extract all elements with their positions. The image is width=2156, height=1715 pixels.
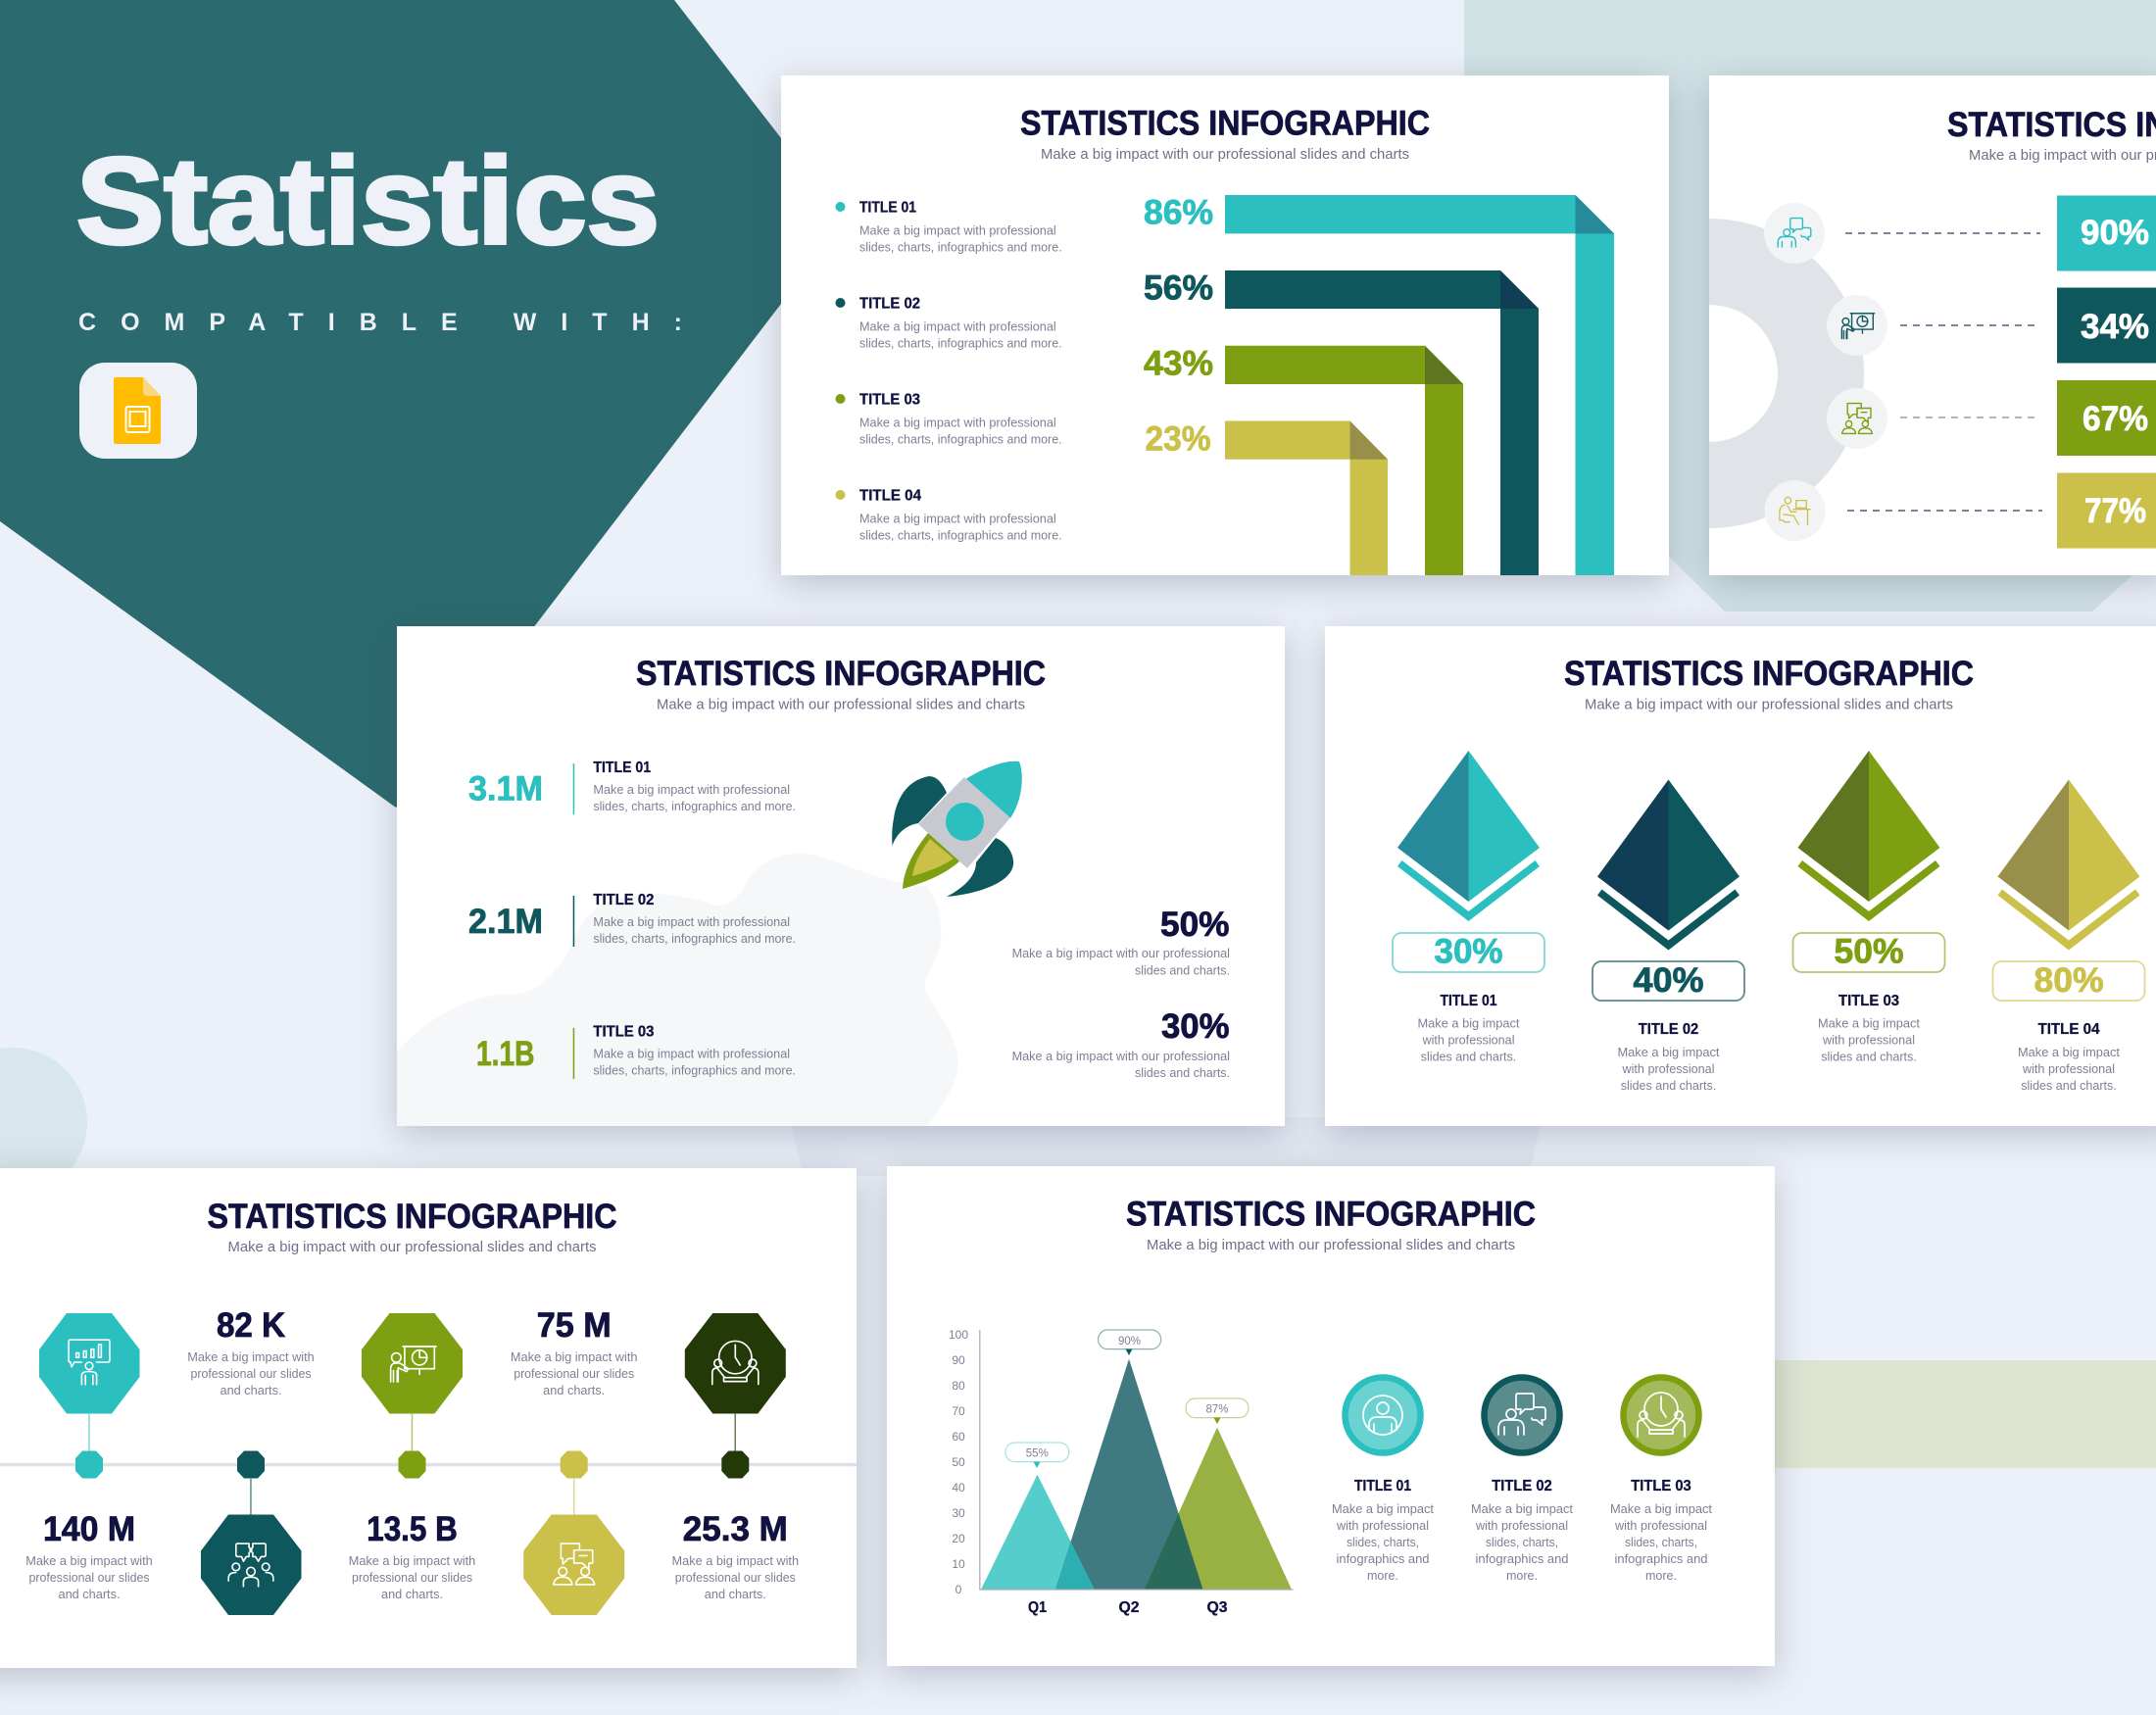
item 90% [1764, 196, 2156, 270]
callout 90%: 90% [1118, 1334, 1141, 1348]
stat row 1.1B: TITLE 03 [593, 1023, 654, 1041]
ribbon bar 56%: 56% [1144, 269, 1213, 308]
ribbon bar 56% [1144, 269, 1539, 575]
node: clock meeting, 25.3 M: 25.3 M [683, 1510, 788, 1548]
stat row 2.1M: TITLE 02 [593, 892, 654, 908]
y axis labels: 10 [952, 1557, 965, 1571]
y axis labels: 0 [956, 1583, 962, 1596]
item: title 01 [1332, 1378, 1435, 1583]
legend item 1: Make a big impact with professional [859, 223, 1056, 237]
panel: gear percentages [1709, 75, 2156, 575]
stat row 2.1M: 2.1M [468, 903, 543, 941]
stat row 3.1M: TITLE 01 [593, 760, 651, 776]
legend item 3 [835, 392, 1062, 447]
stat 30%: slides and charts. [1135, 1066, 1230, 1080]
item: title 03: with professional [1614, 1519, 1707, 1533]
legend item 4: slides, charts, infographics and more. [859, 529, 1062, 543]
item 77%: 77% [2084, 492, 2146, 530]
diamond 80% [1993, 780, 2144, 1093]
callout 55%: 55% [1026, 1446, 1049, 1460]
item 90%: 90% [2081, 214, 2149, 252]
diamond 50%: 50% [1835, 933, 1903, 970]
panel: triangle chart [887, 1166, 1775, 1666]
legend item 2 [835, 296, 1062, 351]
node: chart presenter, 140 M [25, 1313, 153, 1601]
y axis labels: 30 [952, 1506, 965, 1520]
ribbon bar 86% [1144, 194, 1614, 575]
diamond 80%: Make a big impact [2018, 1046, 2121, 1059]
item 77% [1764, 472, 2156, 549]
item: title 02 [1471, 1378, 1574, 1583]
item: title 03 [1610, 1378, 1713, 1583]
diamond 50%: with professional [1822, 1033, 1915, 1047]
icon: rocket [892, 761, 1022, 897]
hero title: Statistics [76, 133, 660, 270]
chart: triangles: Q1 [1028, 1599, 1047, 1616]
diamond 50%: TITLE 03 [1838, 993, 1899, 1009]
y axis labels: 20 [952, 1532, 965, 1545]
diamond 50%: slides and charts. [1821, 1051, 1917, 1064]
diamond 30%: Make a big impact [1417, 1017, 1520, 1031]
item: title 02: Make a big impact [1471, 1502, 1574, 1516]
subheading: Make a big impact with our professional slides and charts [1147, 1237, 1515, 1253]
ribbon bar 43%: 43% [1144, 345, 1213, 382]
node: clock meeting, 25.3 M: professional our slides [675, 1571, 796, 1585]
item: title 03: TITLE 03 [1631, 1478, 1691, 1494]
panel: timeline [0, 1168, 857, 1668]
callout 55% [1005, 1443, 1069, 1468]
background shape: pale green band [1775, 1360, 2156, 1468]
item: title 01: slides, charts, [1347, 1536, 1419, 1549]
node: presenter, 13.5 B: professional our slides [352, 1571, 472, 1585]
subheading: Make a big impact with our professional slides and charts [1585, 696, 1953, 713]
stat 30%: Make a big impact with our professional [1012, 1050, 1230, 1063]
node: conversation, 75 M: and charts. [543, 1384, 605, 1397]
diamond 40%: with professional [1621, 1062, 1715, 1076]
stat 30%: 30% [1161, 1007, 1229, 1046]
diamond 30%: slides and charts. [1421, 1051, 1516, 1064]
node: conversation, 75 M: 75 M [537, 1306, 612, 1345]
heading: STATISTICS INFOGRAPHIC [208, 1198, 617, 1236]
diamond 40%: TITLE 02 [1639, 1021, 1698, 1038]
diamond 40%: Make a big impact [1617, 1046, 1720, 1059]
background shape: faint hexagon behind panels [789, 1117, 1543, 1176]
diamond 80%: slides and charts. [2021, 1079, 2117, 1093]
legend item 1: TITLE 01 [859, 200, 916, 216]
diamond 50% [1793, 751, 1944, 1064]
legend item 4: TITLE 04 [859, 488, 921, 504]
node: presenter, 13.5 B [349, 1313, 475, 1601]
stat row 1.1B: 1.1B [476, 1035, 535, 1073]
stat row 3.1M: 3.1M [468, 770, 543, 808]
node: group, 82 K [187, 1306, 315, 1615]
timeline axis [0, 1463, 857, 1466]
legend item 3: slides, charts, infographics and more. [859, 433, 1062, 447]
stat 50%: 50% [1160, 906, 1229, 944]
legend item 3: Make a big impact with professional [859, 416, 1056, 429]
node: clock meeting, 25.3 M: Make a big impact with [672, 1554, 799, 1568]
stat 50%: slides and charts. [1135, 964, 1230, 978]
node: conversation, 75 M [511, 1306, 637, 1615]
item 67% [1827, 380, 2156, 456]
y axis labels: 70 [952, 1404, 965, 1418]
node: presenter, 13.5 B: and charts. [381, 1588, 443, 1601]
legend item 2: TITLE 02 [859, 296, 920, 312]
diamond 30%: TITLE 01 [1441, 993, 1497, 1009]
y axis labels: 80 [952, 1379, 965, 1393]
item 67%: 67% [2082, 400, 2148, 438]
smoke cloud [397, 854, 958, 1126]
node: group, 82 K: 82 K [217, 1306, 285, 1345]
item 34% [1827, 288, 2156, 363]
stat row 1.1B: slides, charts, infographics and more. [593, 1064, 796, 1078]
panel: rocket statistics [397, 626, 1285, 1126]
legend item 2: slides, charts, infographics and more. [859, 337, 1062, 351]
node: presenter, 13.5 B: 13.5 B [367, 1510, 458, 1548]
node: conversation, 75 M: Make a big impact with [511, 1350, 637, 1364]
panel: diamonds [1325, 626, 2156, 1126]
subheading: Make a big impact with our professional slides and charts [1041, 146, 1409, 163]
legend item 2: Make a big impact with professional [859, 319, 1056, 333]
diamond 30%: with professional [1421, 1033, 1515, 1047]
item: title 02: more. [1506, 1569, 1538, 1583]
subheading: Make a big impact with our professional slides and charts [657, 696, 1025, 713]
node: conversation, 75 M: professional our slides [514, 1367, 634, 1381]
legend item 4 [835, 488, 1062, 543]
ribbon bar 86%: 86% [1144, 194, 1213, 231]
diamond 40%: slides and charts. [1621, 1079, 1716, 1093]
diamond 30% [1393, 751, 1544, 1064]
stat row 2.1M: Make a big impact with professional [593, 915, 790, 929]
node: group, 82 K: and charts. [220, 1384, 282, 1397]
subheading: Make a big impact with our professional slides and charts [227, 1239, 596, 1255]
compatible with label: COMPATIBLE WITH: [78, 309, 682, 336]
y axis labels: 50 [952, 1455, 965, 1469]
panel: ribbon bars [781, 75, 1669, 575]
item: title 02: TITLE 02 [1492, 1478, 1552, 1494]
diamond 50%: Make a big impact [1818, 1017, 1921, 1031]
item: title 01: more. [1367, 1569, 1398, 1583]
stat row 1.1B [476, 1023, 796, 1079]
node: chart presenter, 140 M: professional our slides [29, 1571, 149, 1585]
chart: triangles: Q2 [1119, 1599, 1140, 1616]
node: group, 82 K: Make a big impact with [187, 1350, 315, 1364]
legend item 3: TITLE 03 [859, 392, 920, 408]
stat 50%: Make a big impact with our professional [1012, 947, 1230, 960]
background shape: pale teal hexagon [1464, 0, 2156, 612]
diamond 40%: 40% [1633, 961, 1703, 1000]
node: clock meeting, 25.3 M [672, 1313, 799, 1601]
diamond 80%: 80% [2034, 961, 2103, 1000]
background shape: pale teal circle [0, 1048, 87, 1197]
ribbon bar 23%: 23% [1145, 419, 1211, 459]
icon: google slides [79, 363, 197, 459]
heading: STATISTICS INFOGRAPHIC [636, 655, 1046, 693]
stat row 3.1M: Make a big impact with professional [593, 783, 790, 797]
callout 87% [1186, 1398, 1249, 1424]
item: title 01: infographics and [1337, 1552, 1430, 1566]
heading: STATISTICS INFOGRAPHIC [1020, 104, 1430, 143]
stat row 2.1M [468, 892, 796, 947]
legend item 1 [835, 200, 1062, 255]
node: chart presenter, 140 M: and charts. [59, 1588, 120, 1601]
stat row 1.1B: Make a big impact with professional [593, 1047, 790, 1060]
node: chart presenter, 140 M: Make a big impact with [25, 1554, 153, 1568]
ribbon bar 43% [1144, 345, 1463, 575]
y axis labels [949, 1328, 968, 1596]
chart: triangles [949, 1328, 1294, 1616]
y axis labels: 90 [952, 1353, 965, 1367]
stat row 3.1M [468, 760, 796, 814]
diamond 30%: 30% [1435, 933, 1503, 970]
item: title 03: Make a big impact [1610, 1502, 1713, 1516]
item: title 02: slides, charts, [1486, 1536, 1558, 1549]
item: title 03: slides, charts, [1625, 1536, 1697, 1549]
stat row 3.1M: slides, charts, infographics and more. [593, 800, 796, 813]
heading: STATISTICS INFOGRAPHIC [1126, 1196, 1536, 1233]
half ring [1709, 219, 1864, 528]
node: presenter, 13.5 B: Make a big impact with [349, 1554, 475, 1568]
y axis labels: 100 [949, 1328, 968, 1342]
stat row 2.1M: slides, charts, infographics and more. [593, 932, 796, 946]
legend item 1: slides, charts, infographics and more. [859, 241, 1062, 255]
node: chart presenter, 140 M: 140 M [43, 1510, 135, 1548]
callout 87%: 87% [1205, 1402, 1229, 1416]
stat 50% [1012, 906, 1230, 978]
ribbon bar 23% [1145, 419, 1388, 575]
item: title 03: more. [1645, 1569, 1677, 1583]
item: title 01: TITLE 01 [1354, 1478, 1411, 1494]
chart: triangles: Q3 [1207, 1599, 1228, 1616]
item: title 02: with professional [1475, 1519, 1568, 1533]
y axis labels: 40 [952, 1481, 965, 1494]
node: group, 82 K: professional our slides [190, 1367, 312, 1381]
diamond 80%: TITLE 04 [2038, 1021, 2100, 1038]
stat 30% [1012, 1007, 1230, 1080]
item: title 01: Make a big impact [1332, 1502, 1435, 1516]
diamond 40% [1592, 780, 1744, 1093]
item 34%: 34% [2081, 308, 2149, 346]
diamond 80%: with professional [2022, 1062, 2115, 1076]
background shape: dark teal hexagon [0, 0, 845, 808]
legend item 4: Make a big impact with professional [859, 512, 1056, 525]
item: title 02: infographics and [1476, 1552, 1569, 1566]
y axis labels: 60 [952, 1430, 965, 1444]
node: clock meeting, 25.3 M: and charts. [705, 1588, 766, 1601]
item: title 03: infographics and [1615, 1552, 1708, 1566]
item: title 01: with professional [1336, 1519, 1429, 1533]
heading: STATISTICS INFOGRAPHIC [1564, 655, 1974, 693]
callout 90% [1099, 1330, 1161, 1355]
